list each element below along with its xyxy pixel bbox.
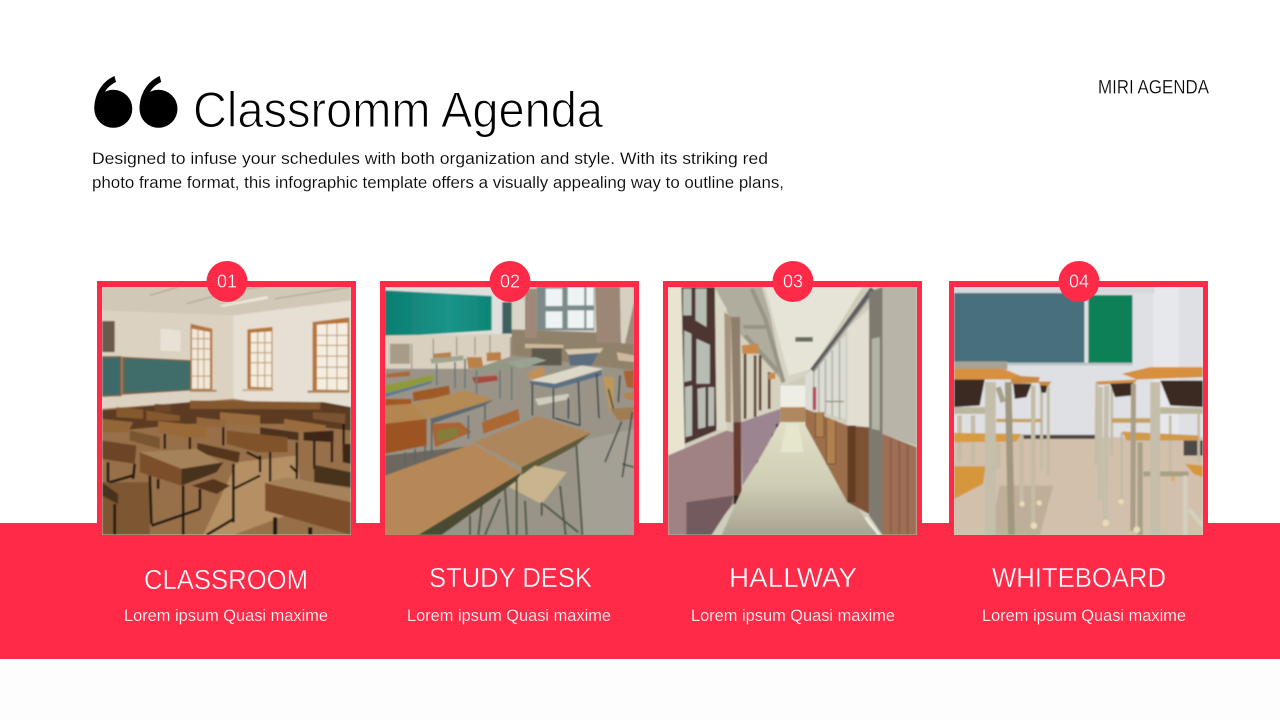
photo: whiteboard [954,287,1203,535]
photo frame 4 [949,281,1208,535]
brand label: MIRI AGENDA [1098,78,1209,98]
photo: hallway [668,287,917,535]
icon: quotation marks [94,76,178,128]
badge 01: 01 [217,272,237,292]
badge 04: 04 [1069,272,1089,292]
heading: whiteboard: WHITEBOARD [992,562,1166,593]
photo frame 3 [663,281,922,535]
badge 04 [1058,261,1100,302]
badge 03: 03 [783,272,803,292]
photo frame 1 [97,281,356,535]
badge 02: 02 [500,272,520,292]
card 4: whiteboard [940,261,1217,625]
photo: study desks [385,287,634,535]
intro text [92,150,784,192]
caption 1: Lorem ipsum Quasi maxime [124,607,328,625]
card 2: study desk [375,261,652,625]
intro text: photo frame format, this infographic template offers a visually appealing way to outline plans, [92,174,784,192]
intro text: Designed to infuse your schedules with both organization and style. With its striking red [92,150,768,168]
badge 03 [772,261,814,302]
card 1: classroom [90,261,367,625]
badge 01 [206,261,248,302]
header block [92,76,784,192]
heading: study desk: STUDY DESK [429,562,592,593]
card 3: hallway [655,261,933,625]
caption 2: Lorem ipsum Quasi maxime [407,607,611,625]
heading: classroom: CLASSROOM [144,564,308,595]
photo frame 2 [380,281,639,535]
badge 02 [490,261,530,302]
red band [0,523,1280,659]
title: Classromm Agenda [193,82,603,138]
heading: hallway: HALLWAY [729,562,857,593]
caption 3: Lorem ipsum Quasi maxime [691,607,895,625]
photo: classroom [102,287,351,535]
caption 4: Lorem ipsum Quasi maxime [982,607,1186,625]
